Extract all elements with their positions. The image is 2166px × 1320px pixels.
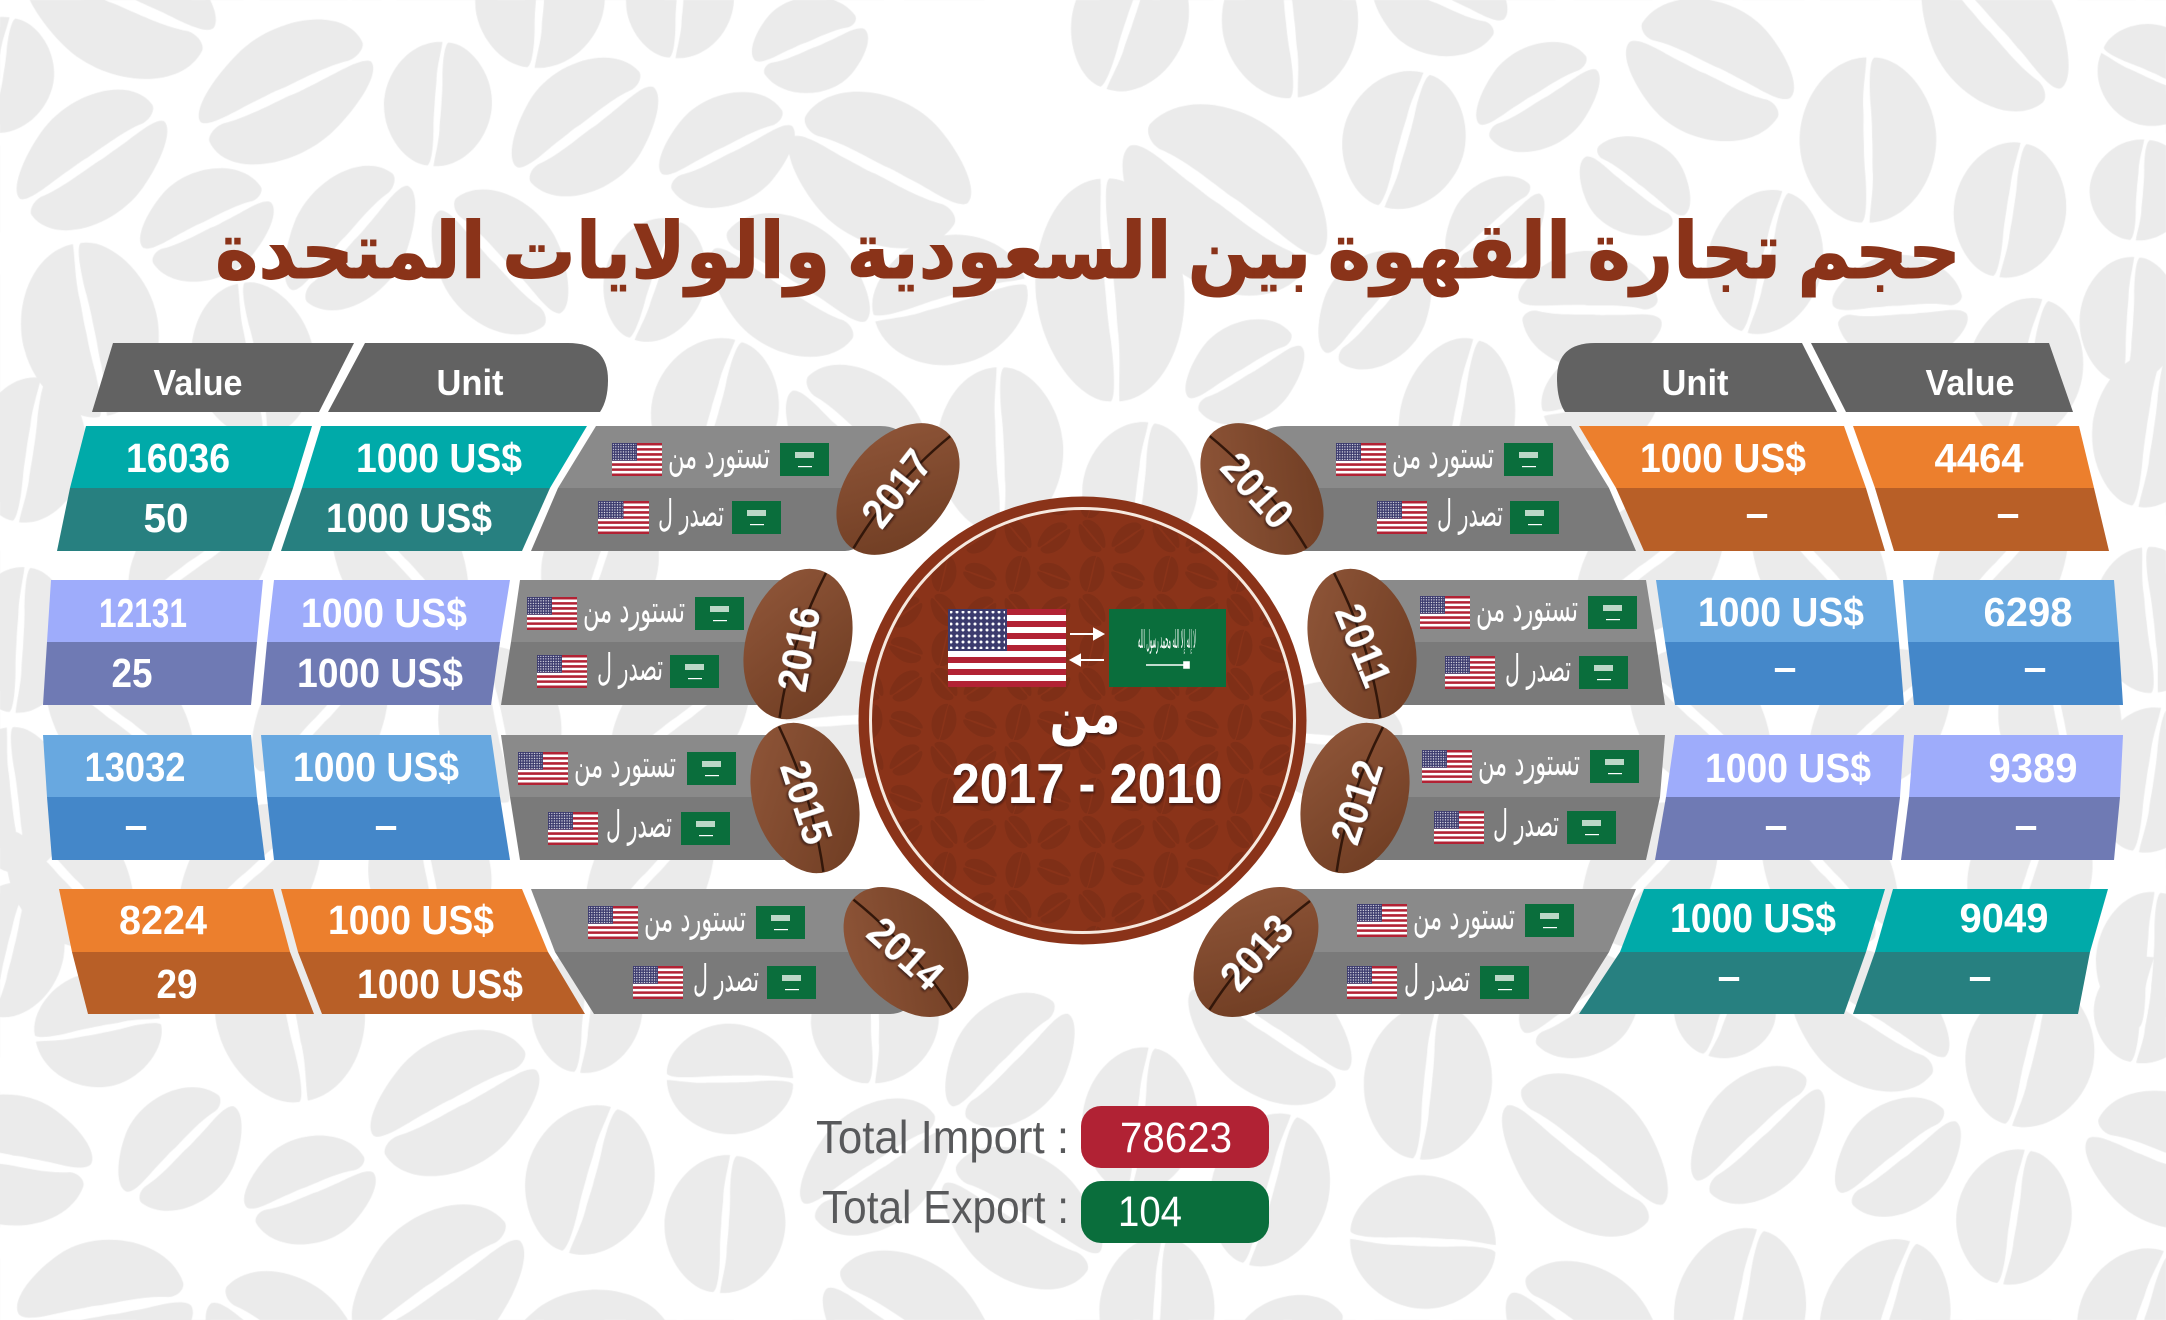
panel: 2010 row: – — [1997, 490, 2019, 536]
panel: 2011 row: 1000 US$ — [1698, 589, 1864, 635]
panel: 2010 row: تصدر ل — [1437, 492, 1503, 535]
panel: 2012 row — [1370, 735, 2123, 860]
panel: 2013 row — [1255, 889, 2108, 1014]
totals: import — [816, 1106, 1269, 1168]
panel: 2014 row: 1000 US$ — [357, 961, 523, 1007]
panel: 2014 row: 1000 US$ — [328, 897, 494, 943]
totals: import: Total Import : — [816, 1111, 1069, 1163]
panel: 2012 row: تصدر ل — [1493, 802, 1559, 845]
left table header: Unit — [436, 362, 504, 403]
panel: 2015 row: 13032 — [84, 744, 186, 790]
bean badge: 2014: 2014 — [858, 907, 953, 1000]
panel: 2015 row: – — [125, 802, 147, 848]
panel: 2012 row: 1000 US$ — [1705, 745, 1871, 791]
panel: 2012 row: – — [2015, 802, 2037, 848]
bean badge: 2011: 2011 — [1326, 597, 1401, 693]
panel: 2010 row: 1000 US$ — [1640, 435, 1806, 481]
panel: 2016 row: 1000 US$ — [301, 590, 467, 636]
bean badge: 2012 — [1283, 709, 1427, 887]
panel: 2016 row: تستورد من — [583, 588, 685, 631]
title: حجم تجارة القهوة بين السعودية والولايات المتحدة — [215, 207, 1961, 297]
central circle: لا إله إلا الله محمد رسول الله — [1138, 625, 1196, 655]
right table header — [1557, 343, 2073, 412]
panel: 2015 row: – — [375, 802, 397, 848]
bean badge: 2016: 2016 — [768, 603, 829, 695]
panel: 2010 row: 4464 — [1934, 435, 2024, 481]
panel: 2017 row: 16036 — [126, 435, 230, 481]
bean badge: 2016 — [726, 555, 870, 733]
totals: export — [822, 1181, 1269, 1243]
panel: 2015 row: تصدر ل — [606, 803, 672, 846]
panel: 2011 row — [1370, 580, 2123, 705]
bean badge: 2013: 2013 — [1210, 905, 1302, 1000]
panel: 2011 row: 6298 — [1984, 589, 2072, 635]
panel: 2015 row: 1000 US$ — [293, 744, 459, 790]
panel: 2013 row: 1000 US$ — [1670, 895, 1836, 941]
panel: 2010 row: – — [1746, 490, 1768, 536]
panel: 2016 row — [43, 580, 800, 705]
icon: large Saudi flag — [1109, 609, 1226, 687]
totals: import: 78623 — [1120, 1114, 1232, 1162]
panel: 2013 row: تستورد من — [1413, 895, 1515, 938]
panel: 2017 row: 1000 US$ — [356, 435, 522, 481]
panel: 2017 row: تصدر ل — [658, 492, 724, 535]
bean badge: 2011 — [1290, 555, 1434, 733]
center label: from: من — [1050, 682, 1120, 747]
bean badge: 2015: 2015 — [771, 754, 842, 850]
panel: 2013 row: – — [1969, 953, 1991, 999]
panel: 2012 row: 9389 — [1988, 745, 2078, 791]
panel: 2016 row: 12131 — [99, 590, 187, 636]
icon: large US flag — [948, 609, 1066, 687]
left table header — [92, 343, 608, 412]
bean badge: 2014 — [819, 863, 993, 1041]
panel: 2016 row: 1000 US$ — [297, 650, 463, 696]
panel: 2014 row: تستورد من — [644, 897, 746, 940]
panel: 2012 row: تستورد من — [1478, 741, 1580, 784]
panel: 2010 row: تستورد من — [1392, 434, 1494, 477]
panel: 2017 row: 50 — [144, 495, 188, 541]
bean badge: 2010: 2010 — [1212, 443, 1304, 538]
panel: 2016 row: 25 — [112, 650, 152, 696]
panel: 2014 row: 8224 — [119, 897, 207, 943]
bean badge: 2012: 2012 — [1321, 754, 1392, 850]
bean badge: 2010 — [1175, 399, 1349, 579]
panel: 2011 row: تصدر ل — [1505, 647, 1571, 690]
panel: 2013 row: 9049 — [1960, 895, 2048, 941]
bean badge: 2013 — [1169, 863, 1343, 1041]
panel: 2015 row: تستورد من — [574, 743, 676, 786]
panel: 2014 row — [59, 889, 915, 1014]
panel: 2017 row — [57, 426, 905, 551]
panel: 2014 row: 29 — [156, 961, 198, 1007]
left table header: Value — [154, 362, 242, 403]
panel: 2011 row: – — [1774, 644, 1796, 690]
totals: export: 104 — [1118, 1188, 1182, 1236]
panel: 2017 row: تستورد من — [668, 434, 770, 477]
right table header: Value — [1926, 362, 2014, 403]
bean badge: 2015 — [733, 709, 877, 887]
arrow: Saudi to US — [1071, 655, 1104, 665]
panel: 2017 row: 1000 US$ — [326, 495, 492, 541]
panel: 2011 row: – — [2024, 644, 2046, 690]
panel: 2016 row: تصدر ل — [597, 646, 663, 689]
panel: 2010 row — [1255, 426, 2109, 551]
arrow: US to Saudi — [1070, 629, 1103, 639]
bean badge: 2017: 2017 — [852, 440, 941, 536]
panel: 2013 row: – — [1718, 953, 1740, 999]
panel: 2015 row — [43, 735, 800, 860]
panel: 2014 row: تصدر ل — [693, 957, 759, 1000]
panel: 2011 row: تستورد من — [1476, 587, 1578, 630]
right table header: Unit — [1662, 362, 1729, 403]
center label: years: 2017 - 2010 — [952, 752, 1222, 816]
totals: export: Total Export : — [822, 1181, 1069, 1233]
central circle — [858, 496, 1306, 944]
panel: 2012 row: – — [1765, 802, 1787, 848]
bean badge: 2017 — [811, 399, 985, 579]
panel: 2013 row: تصدر ل — [1404, 957, 1470, 1000]
